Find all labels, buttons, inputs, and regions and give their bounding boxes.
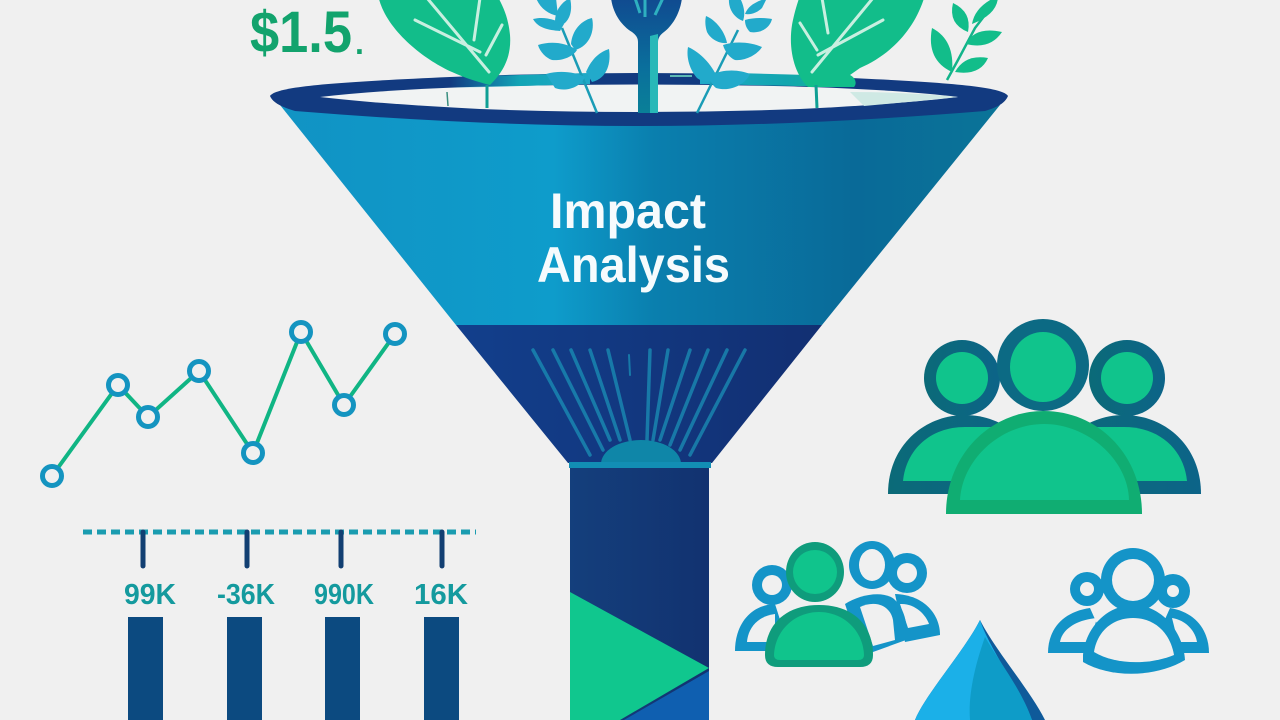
right big leaf	[791, 0, 925, 108]
price figure: $1.5	[250, 0, 352, 65]
neck green triangle	[570, 592, 709, 720]
left blue sprig	[533, 0, 610, 113]
neck blue triangle	[624, 671, 709, 720]
chart labels: 16K	[414, 579, 468, 611]
funnel title	[537, 183, 730, 293]
fan rays	[533, 350, 745, 455]
funnel cone	[280, 105, 1000, 325]
chart labels: 99K	[124, 579, 176, 611]
right blue sprig	[670, 0, 772, 113]
funnel neck	[570, 462, 709, 720]
chart labels: -36K	[217, 579, 275, 611]
icon: blue people group	[1048, 548, 1209, 674]
small period after price: .	[355, 25, 364, 61]
right green sprig	[931, 0, 1002, 80]
funnel title: Analysis	[537, 237, 730, 293]
rim teal right	[700, 72, 845, 87]
funnel opening	[320, 84, 958, 112]
chart ticks	[143, 532, 442, 566]
funnel lower dark section	[456, 325, 822, 468]
pale wedge in opening	[850, 92, 958, 106]
icon: mixed people group	[735, 541, 940, 667]
funnel title: Impact	[550, 183, 706, 239]
icon: water drop	[915, 620, 1045, 720]
bar chart	[83, 532, 476, 720]
collar band	[569, 462, 711, 468]
line chart	[42, 322, 404, 486]
chart labels	[124, 579, 468, 611]
central stem	[611, 0, 682, 113]
chart bars	[128, 617, 459, 720]
funnel rim	[270, 72, 1008, 126]
fan glow	[601, 440, 681, 462]
rim teal left	[450, 73, 590, 88]
icon: large green people group	[888, 319, 1201, 514]
chart labels: 990K	[314, 579, 374, 611]
left big leaf	[378, 0, 510, 108]
